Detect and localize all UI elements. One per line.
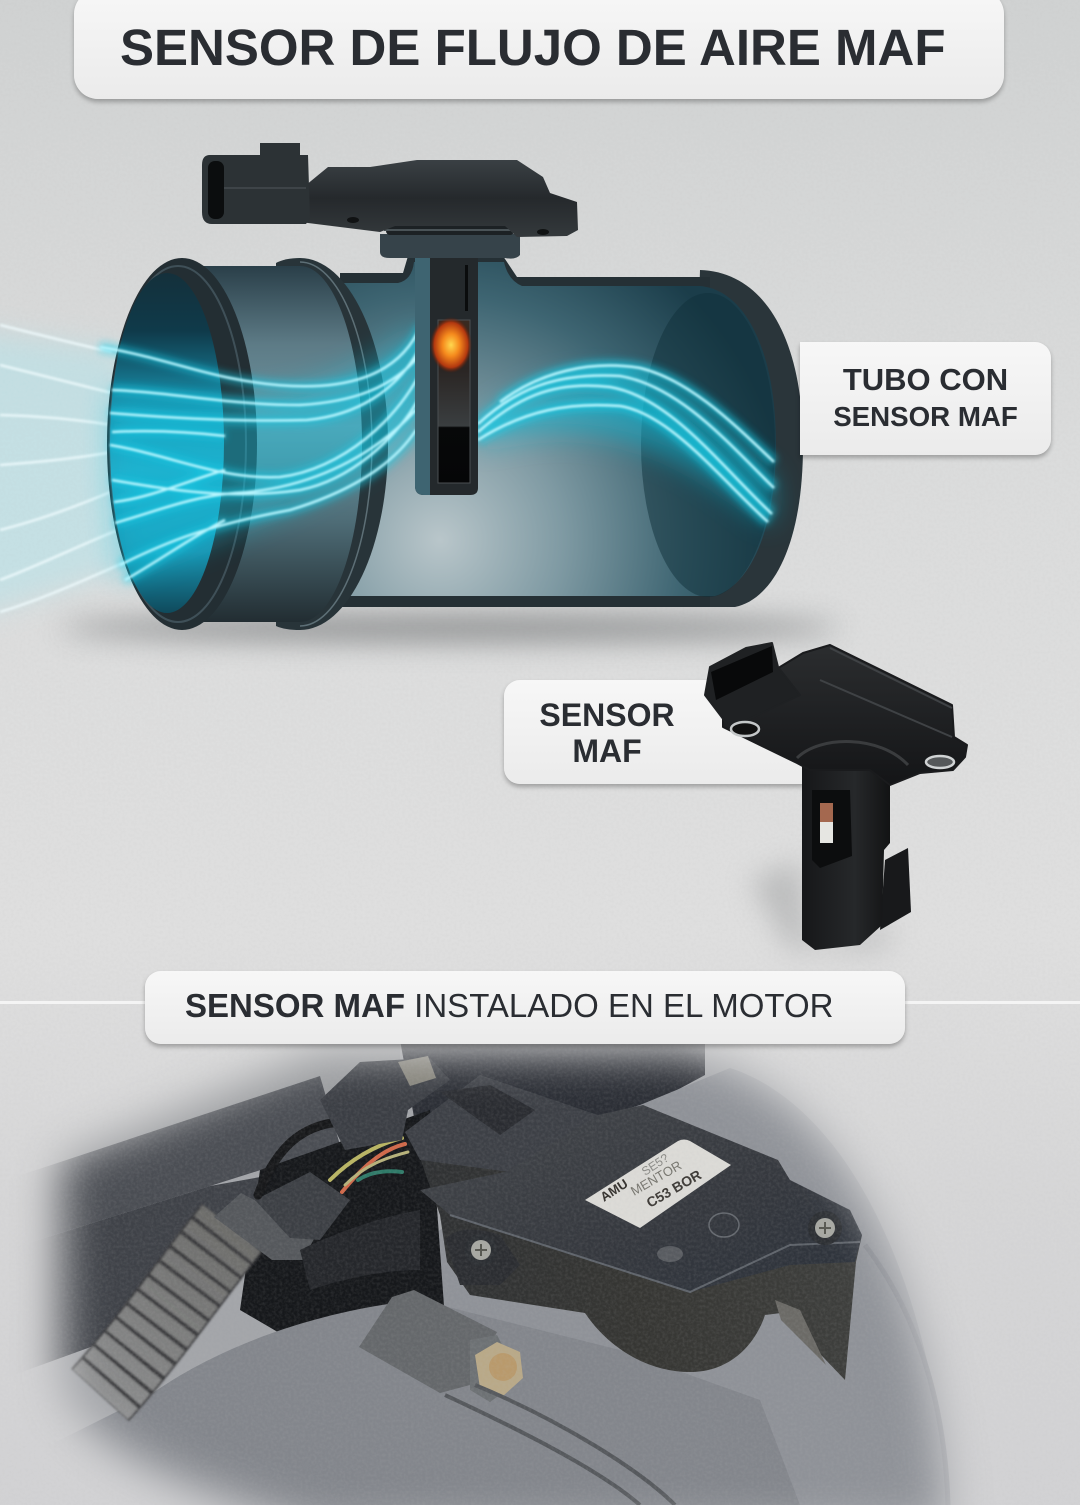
hot element glow (430, 317, 472, 373)
mounting screws (471, 1211, 842, 1260)
lower duct (79, 1304, 800, 1505)
callout: MAF sensor: SENSOR (539, 697, 675, 733)
top plug (320, 1058, 450, 1150)
inlet ring ridge (110, 266, 246, 622)
sensor head plate (300, 160, 578, 237)
duct end ring arc (865, 1245, 948, 1505)
cyan glow of right flow (478, 378, 772, 525)
shadow of separate sensor (750, 860, 900, 950)
plate mounting holes (347, 217, 359, 223)
plate edge highlight (450, 1215, 860, 1292)
second collar ring (276, 258, 388, 630)
mounting hole right (926, 756, 954, 768)
mounting hole left (731, 722, 759, 736)
upper left shroud panels (281, 1071, 348, 1094)
section heading: sensor installed in the engine: SENSOR MAF INSTALADO EN EL MOTOR (185, 987, 833, 1024)
collar body (182, 266, 362, 622)
callout: tube with MAF sensor: TUBO CON (843, 362, 1008, 397)
connector opening (711, 646, 773, 700)
silver plug collar (398, 1056, 436, 1086)
callout: MAF sensor: MAF (572, 733, 642, 769)
paper label on sensor: C53 BOR (644, 1166, 704, 1211)
side wall light wedge (775, 1300, 826, 1365)
black harness under connector (300, 1210, 420, 1290)
plate rivets (657, 1246, 683, 1262)
paper label on sensor (585, 1140, 731, 1228)
paper label on sensor: MENTOR (628, 1158, 684, 1199)
tube interior cutaway (340, 262, 776, 596)
sensing window (812, 790, 852, 868)
duct ribs (445, 1385, 675, 1505)
sensor top plate (723, 645, 967, 785)
broad glow across collar (110, 325, 420, 580)
wire connector (255, 1172, 350, 1240)
sensor neck (380, 234, 520, 259)
dark void behind wires (240, 1110, 445, 1345)
inlet mouth (110, 273, 224, 613)
engine bay backdrop (42, 1044, 966, 1505)
collar ring highlight (300, 262, 372, 626)
MAF connector housing (405, 1075, 598, 1172)
title: SENSOR DE FLUJO DE AIRE MAF (120, 19, 946, 76)
clip tab (880, 848, 911, 930)
outlet end ring (690, 270, 803, 607)
sensor stem (802, 745, 890, 950)
section heading: sensor installed in the engine (145, 971, 905, 1044)
sensor connector (705, 643, 800, 728)
shadow under tube (60, 614, 840, 642)
MAF top plate (420, 1105, 862, 1292)
electrical connector (202, 143, 310, 224)
heating element (820, 803, 833, 825)
callout: tube with MAF sensor (800, 342, 1051, 455)
dark outlet opening (641, 293, 775, 597)
flow lines right of the probe (478, 366, 774, 522)
corrugated wire loom (100, 1228, 232, 1395)
right duct surface (438, 1068, 945, 1505)
callout: tube with MAF sensor: SENSOR MAF (833, 401, 1018, 432)
tube with MAF sensor (100, 143, 803, 630)
air flow streams entering the tube (0, 325, 125, 620)
rubber boot (214, 1193, 317, 1260)
MAF body side wall (421, 1160, 862, 1380)
photo grain (0, 1040, 1080, 1505)
screw ear left (457, 1276, 463, 1285)
paper label on sensor: SE5? (639, 1151, 672, 1179)
connector latch (450, 1085, 534, 1135)
dark void top centre (400, 1044, 705, 1118)
title (74, 0, 1004, 99)
tube outer wall (340, 256, 710, 607)
paper label on sensor: AMU (597, 1176, 630, 1205)
plate top ridge (820, 648, 952, 737)
engine photo (28, 1044, 966, 1505)
sensing chip (820, 822, 833, 843)
inlet ring (107, 258, 257, 630)
neck ribs (797, 742, 908, 765)
callout: MAF sensor (504, 680, 804, 784)
divider line at photo top (0, 1001, 1080, 1004)
flow lines left of the probe (100, 325, 425, 580)
MAF probe stem (415, 256, 478, 495)
clamp with brass bolt (359, 1290, 523, 1402)
wires (258, 1122, 408, 1195)
